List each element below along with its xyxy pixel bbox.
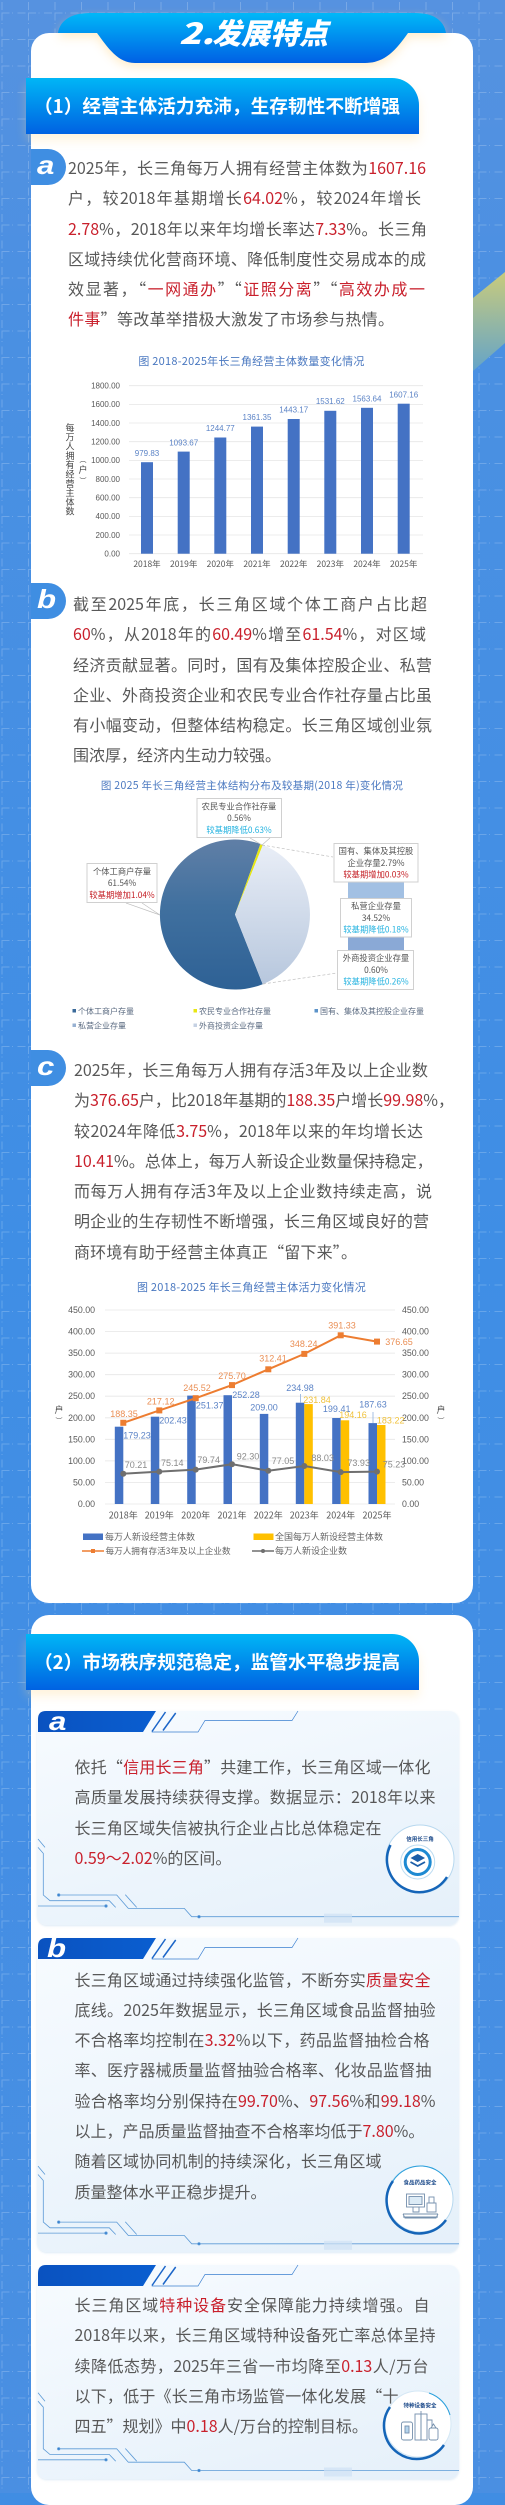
pie chart title: 图 2025 年长三角经营主体结构分布及较基期(2018 年)变化情况 — [101, 778, 403, 793]
y-axis title: ︵ — [80, 455, 86, 465]
combo chart: business vitality 2018-2025: 234.98 — [286, 1383, 314, 1393]
bar chart: number of business entities 2018-2025: 400.00 — [96, 512, 121, 521]
pie chart: business entity structure 2025 — [72, 778, 424, 1032]
text block c — [74, 1057, 454, 1263]
combo chart: business vitality 2018-2025: 209.00 — [250, 1402, 278, 1412]
sub-panel c: special equipment — [37, 2264, 459, 2479]
text block b: 60%，从2018年的60.49%增至61.54%，对区域 — [73, 621, 426, 645]
text block a: 2.78%，2018年以来年均增长率达7.33%。长三角 — [68, 216, 427, 240]
combo chart: business vitality 2018-2025: 2018年 — [109, 1508, 138, 1522]
text block b: 企业、外商投资企业和农民专业合作社存量占比虽 — [73, 682, 432, 706]
combo chart: business vitality 2018-2025: 194.16 — [339, 1410, 367, 1420]
y-axis title: 经 — [65, 468, 75, 480]
combo chart: business vitality 2018-2025: 73.93 — [347, 1458, 370, 1468]
y-axis title: 主 — [65, 486, 75, 499]
text block quality: 验合格率均分别保持在99.70%、97.56%和99.18% — [74, 2088, 435, 2112]
bar chart: number of business entities 2018-2025: 1443.17 — [279, 405, 309, 414]
bar chart: number of business entities 2018-2025: 800.00 — [96, 475, 121, 484]
text block c: 明企业的生存韧性不断增强，长三角区域良好的营 — [74, 1208, 429, 1232]
bar chart: number of business entities 2018-2025: 200.00 — [96, 531, 121, 540]
bar chart: number of business entities 2018-2025: 2020年 — [207, 558, 234, 570]
combo chart: business vitality 2018-2025: 2023年 — [290, 1508, 319, 1522]
bar chart: number of business entities 2018-2025: 2021年 — [243, 558, 271, 570]
callout: individual businesses: 个体工商户存量 — [93, 866, 151, 878]
bar chart: number of business entities 2018-2025: 1400.00 — [91, 419, 121, 428]
icon: special equipment safety: 特种设备安全 — [403, 2402, 437, 2410]
text block special equipment — [74, 2292, 436, 2437]
axis units: ︶ — [56, 1416, 62, 1426]
text block quality: 率、医疗器械质量监督抽验合格率、化妆品监督抽 — [74, 2057, 432, 2081]
sub-panel a: credit — [37, 1711, 459, 1925]
text block quality: 不合格率均控制在3.32%以下，药品监督抽检合格 — [74, 2027, 429, 2051]
pie legend: 外商投资企业存量 — [199, 1020, 263, 1032]
axis units: ︵ — [438, 1402, 444, 1412]
combo chart: business vitality 2018-2025: 50.00 — [73, 1477, 95, 1487]
combo chart: business vitality 2018-2025: 2020年 — [181, 1508, 210, 1522]
bar chart: number of business entities 2018-2025: 1531.62 — [316, 397, 345, 406]
bar chart: number of business entities 2018-2025: 1600.00 — [91, 400, 121, 409]
orange line — [120, 1332, 380, 1426]
text block special equipment: 2018年以来，长三角区域特种设备死亡率总体呈持 — [74, 2322, 436, 2346]
combo chart: business vitality 2018-2025: 217.12 — [147, 1396, 174, 1406]
combo chart: business vitality 2018-2025: 252.28 — [232, 1390, 260, 1400]
y-axis title: 户 — [78, 463, 88, 476]
text block a: 件事”等改革举措极大激发了市场参与热情。 — [68, 306, 394, 330]
bar chart: number of business entities 2018-2025: 2019年 — [170, 558, 198, 570]
y-axis title — [65, 421, 88, 518]
badge b — [31, 583, 66, 619]
banner and circuit decoration c — [38, 2264, 459, 2476]
combo chart: business vitality 2018-2025: 350.00 — [68, 1348, 95, 1358]
combo chart: business vitality 2018-2025: 179.23 — [123, 1430, 151, 1440]
text block quality: 底线。2025年数据显示，长三角区域食品监督抽验 — [74, 1997, 436, 2021]
combo chart: business vitality 2018-2025: 231.84 — [303, 1395, 331, 1405]
combo chart: business vitality 2018-2025: 75.14 — [161, 1458, 184, 1468]
text block a: 效显著，“一网通办”“证照分离”“高效办成一 — [68, 276, 425, 300]
pie legend: 农民专业合作社存量 — [199, 1006, 271, 1017]
combo chart: business vitality 2018-2025: 0.00 — [78, 1499, 95, 1509]
bar chart: number of business entities 2018-2025: 1800.00 — [91, 382, 121, 390]
icon: credit Yangtze delta: 信用长三角 — [406, 1835, 434, 1843]
callout: foreign investment: 0.60% — [364, 964, 388, 976]
combo chart: business vitality 2018-2025: 188.35 — [110, 1409, 138, 1419]
bar chart: number of business entities 2018-2025: 2018年 — [133, 558, 161, 570]
text block a: 区域持续优化营商环境、降低制度性交易成本的成 — [68, 246, 426, 270]
y-axis title: 每 — [65, 421, 75, 434]
combo chart: business vitality 2018-2025: 391.33 — [328, 1320, 356, 1330]
y-axis title: 营 — [65, 477, 75, 490]
combo chart: business vitality 2018-2025: 2025年 — [363, 1508, 391, 1522]
combo chart: business vitality 2018-2025: 100.00 — [402, 1456, 429, 1466]
combo chart: business vitality 2018-2025: 2021年 — [218, 1508, 246, 1522]
callout: private enterprises: 较基期降低0.18% — [343, 924, 409, 936]
text block special equipment: 续降低态势，2025年三省一市均降至0.13人/万台 — [74, 2353, 428, 2377]
text block c: 商环境有助于经营主体真正“留下来”。 — [74, 1239, 357, 1263]
bar chart: number of business entities 2018-2025: 2024年 — [353, 558, 381, 570]
gray line — [120, 1461, 380, 1477]
text block c: 2025年，长三角每万人拥有存活3年及以上企业数 — [74, 1057, 428, 1081]
combo chart: business vitality 2018-2025: 77.05 — [272, 1456, 294, 1466]
section heading 1 — [26, 78, 419, 134]
combo chart: business vitality 2018-2025: 250.00 — [402, 1391, 429, 1401]
text block b — [73, 591, 432, 766]
combo chart: business vitality 2018-2025: 183.22 — [377, 1416, 404, 1426]
combo chart: business vitality 2018-2025: 450.00 — [402, 1305, 429, 1315]
y-axis title: 拥 — [65, 449, 75, 462]
pie legend: 国有、集体及其控股企业存量 — [320, 1006, 424, 1017]
combo chart: business vitality 2018-2025: 300.00 — [402, 1370, 429, 1380]
sub-panel b: quality supervision — [37, 1938, 459, 2252]
combo chart: business vitality 2018-2025: 350.00 — [402, 1348, 429, 1358]
callout: individual businesses — [87, 864, 157, 902]
title tab — [56, 11, 450, 72]
text block a — [68, 155, 427, 330]
icon: credit Yangtze delta — [386, 1824, 454, 1894]
combo chart: business vitality 2018-2025: 400.00 — [402, 1327, 429, 1337]
axis units: ︵ — [56, 1402, 62, 1412]
combo chart: business vitality 2018-2025: 50.00 — [402, 1477, 424, 1487]
icon: food and drug safety: 食品药品安全 — [403, 2178, 437, 2186]
pie legend: 私营企业存量 — [78, 1020, 126, 1032]
combo chart: business vitality 2018-2025: 187.63 — [359, 1400, 387, 1410]
callout: farmer cooperatives: 农民专业合作社存量 — [202, 800, 276, 812]
text block special equipment: 长三角区域特种设备安全保障能力持续增强。自 — [74, 2292, 429, 2316]
badge c — [31, 1050, 66, 1086]
bar chart: number of business entities 2018-2025: 2022年 — [280, 558, 308, 570]
callout: private enterprises — [340, 898, 412, 937]
callout: individual businesses: 较基期增加1.04% — [89, 889, 155, 901]
y-axis title: 体 — [65, 495, 75, 508]
combo chart: business vitality 2018-2025: 250.00 — [68, 1391, 95, 1401]
bar chart: number of business entities 2018-2025: 1200.00 — [91, 438, 121, 446]
bar chart: number of business entities 2018-2025: 600.00 — [96, 494, 121, 502]
y-axis title: 数 — [65, 505, 75, 518]
combo chart: business vitality 2018-2025: 88.03 — [311, 1453, 334, 1463]
bar chart: number of business entities 2018-2025 — [65, 353, 423, 570]
text block credit: 依托“信用长三角”共建工作，长三角区域一体化 — [74, 1754, 430, 1778]
text block quality: 长三角区域通过持续强化监管，不断夯实质量安全 — [74, 1966, 430, 1990]
badge a: a — [37, 150, 54, 180]
text block b: 经济贡献显著。同时，国有及集体控股企业、私营 — [73, 652, 432, 676]
combo chart: business vitality 2018-2025: 2024年 — [326, 1508, 355, 1522]
banner and circuit decoration b — [38, 1938, 459, 2250]
bar chart: number of business entities 2018-2025: 1607.16 — [389, 390, 419, 399]
letter b: b — [47, 1932, 66, 1962]
yellow bars — [304, 1404, 386, 1504]
combo chart legend: 每万人新设企业数 — [275, 1544, 347, 1557]
callout: individual businesses: 61.54% — [108, 877, 137, 889]
bar chart: number of business entities 2018-2025: 0.00 — [104, 550, 121, 558]
combo chart title: 图 2018-2025 年长三角经营主体活力变化情况 — [137, 1279, 366, 1295]
section heading 2 — [26, 1634, 419, 1690]
badge c: c — [37, 1051, 54, 1081]
combo chart: business vitality 2018-2025: 245.52 — [183, 1383, 211, 1393]
y-axis title: 人 — [65, 440, 75, 453]
callout: farmer cooperatives — [197, 798, 282, 838]
text block quality — [74, 1966, 436, 2203]
combo chart: business vitality 2018-2025: 376.65 — [385, 1337, 413, 1347]
y-axis title: ︶ — [80, 476, 86, 486]
combo chart: business vitality 2018-2025: 202.43 — [159, 1416, 187, 1426]
bar chart: number of business entities 2018-2025: 2025年 — [390, 558, 418, 570]
combo chart: business vitality 2018-2025: 150.00 — [402, 1434, 429, 1444]
combo chart: business vitality 2018-2025: 100.00 — [68, 1456, 95, 1466]
pie legend: 个体工商户存量 — [78, 1006, 134, 1017]
combo chart: business vitality 2018-2025: 275.70 — [218, 1371, 246, 1381]
combo chart: business vitality 2018-2025: 200.00 — [68, 1413, 95, 1423]
bar chart: number of business entities 2018-2025: 1000.00 — [91, 456, 121, 465]
callout: farmer cooperatives: 0.56% — [227, 812, 251, 824]
axis units: 户 — [54, 1403, 64, 1416]
badge b: b — [37, 584, 56, 614]
y-axis title: 万 — [65, 430, 75, 443]
combo chart: business vitality 2018-2025: 450.00 — [68, 1305, 95, 1315]
banner and circuit decoration a — [38, 1710, 459, 1922]
bar chart: number of business entities 2018-2025: 979.83 — [135, 449, 160, 458]
callout: state-owned: 企业存量2.79% — [348, 857, 405, 869]
text block b: 有小幅变动，但整体结构稳定。长三角区域创业氛 — [73, 712, 432, 736]
text block a: 户，较2018年基期增长64.02%，较2024年增长 — [68, 185, 421, 209]
panel: development characteristics, section 1 — [31, 33, 473, 1603]
callout: state-owned: 国有、集体及其控股 — [339, 845, 413, 857]
combo chart: business vitality 2018-2025: 92.30 — [237, 1452, 259, 1462]
axis units — [54, 1402, 446, 1426]
axis units: 户 — [436, 1403, 446, 1416]
text block credit: 高质量发展持续获得支撑。数据显示：2018年以来 — [74, 1784, 436, 1808]
combo chart: business vitality 2018-2025: 70.21 — [125, 1460, 147, 1470]
title text: 2. — [179, 11, 214, 53]
combo chart legend: 每万人拥有存活3年及以上企业数 — [106, 1545, 231, 1557]
callout: state-owned — [334, 844, 418, 882]
combo chart: business vitality 2018-2025: 400.00 — [68, 1327, 95, 1337]
callout: foreign investment — [338, 950, 414, 990]
panel: section 2 market order — [31, 1615, 473, 2505]
callout: farmer cooperatives: 较基期降低0.63% — [206, 824, 272, 836]
callout: foreign investment: 较基期降低0.26% — [343, 976, 409, 988]
combo chart: business vitality 2018-2025: 251.37 — [196, 1400, 223, 1410]
bar chart: number of business entities 2018-2025: 1244.77 — [206, 424, 235, 433]
text block c: 而每万人拥有存活3年及以上企业数持续走高，说 — [74, 1178, 432, 1202]
pie slices — [160, 840, 310, 990]
bar chart: number of business entities 2018-2025: 1361.35 — [243, 413, 272, 422]
combo chart: business vitality 2018-2025: 312.41 — [259, 1353, 287, 1363]
icon: special equipment safety — [382, 2390, 452, 2460]
combo chart legend: 全国每万人新设经营主体数 — [275, 1530, 383, 1543]
bar chart: number of business entities 2018-2025: 1093.67 — [169, 438, 199, 447]
pie legend — [72, 1006, 424, 1032]
text block c: 为376.65户，比2018年基期的188.35户增长99.98%， — [74, 1087, 454, 1111]
combo chart: business vitality 2018-2025: 348.24 — [290, 1339, 317, 1349]
badge a — [31, 148, 66, 184]
text block a: 2025年，长三角每万人拥有经营主体数为1607.16 — [68, 155, 426, 179]
text block credit — [74, 1754, 436, 1869]
text block quality: 随着区域协同机制的持续深化，长三角区域 — [74, 2148, 382, 2172]
combo chart: business vitality 2018-2025: 199.41 — [323, 1404, 350, 1414]
section heading 2: （2）市场秩序规范稳定，监管水平稳步提高 — [34, 1648, 400, 1675]
y-axis title: 有 — [65, 458, 75, 471]
callout: private enterprises: 私营企业存量 — [351, 900, 401, 912]
combo chart: business vitality 2018-2025: 2019年 — [145, 1508, 174, 1522]
letter a: a — [49, 1706, 66, 1736]
bar chart: number of business entities 2018-2025: 1563.64 — [353, 394, 382, 403]
combo chart legend — [82, 1530, 383, 1557]
text block c: 10.41%。总体上，每万人新设企业数量保持稳定， — [74, 1148, 433, 1172]
text block quality: 质量整体水平正稳步提升。 — [74, 2179, 267, 2203]
combo chart: business vitality 2018-2025 — [54, 1279, 446, 1557]
text block quality: 以上，产品质量监督抽查不合格率均低于7.80%。 — [74, 2118, 424, 2142]
text block credit: 0.59～2.02%的区间。 — [74, 1845, 231, 1869]
section heading 1: （1）经营主体活力充沛，生存韧性不断增强 — [34, 92, 400, 119]
combo chart: business vitality 2018-2025: 2022年 — [254, 1508, 283, 1522]
combo chart: business vitality 2018-2025: 300.00 — [68, 1370, 95, 1380]
text block b: 围浓厚，经济内生动力较强。 — [73, 742, 281, 766]
band colours behind callouts — [348, 880, 404, 900]
axis units: ︶ — [438, 1416, 444, 1426]
combo chart: business vitality 2018-2025: 200.00 — [402, 1413, 429, 1423]
callout: state-owned: 较基期增加0.03% — [343, 868, 409, 880]
text block b: 截至2025年底，长三角区域个体工商户占比超 — [73, 591, 427, 615]
bar chart: number of business entities 2018-2025: 2023年 — [317, 558, 344, 570]
callout: private enterprises: 34.52% — [362, 912, 391, 924]
text block special equipment: 以下，低于《长三角市场监管一体化发展“十 — [74, 2383, 398, 2407]
title text: 发展特点 — [212, 11, 328, 53]
chart title: 图 2018-2025年长三角经营主体数量变化情况 — [138, 353, 365, 369]
combo chart: business vitality 2018-2025: 0.00 — [402, 1499, 419, 1509]
combo chart: business vitality 2018-2025: 150.00 — [68, 1434, 95, 1444]
blue bars — [115, 1395, 377, 1504]
text block credit: 长三角区域失信被执行企业占比总体稳定在 — [74, 1815, 382, 1839]
text block c: 较2024年降低3.75%，2018年以来的年均增长达 — [74, 1118, 423, 1142]
callout: foreign investment: 外商投资企业存量 — [343, 952, 409, 964]
text block special equipment: 四五”规划》中0.18人/万台的控制目标。 — [74, 2413, 368, 2437]
combo chart: business vitality 2018-2025: 75.23 — [383, 1460, 405, 1470]
combo chart: business vitality 2018-2025: 79.74 — [197, 1455, 220, 1465]
combo chart legend: 每万人新设经营主体数 — [105, 1530, 195, 1543]
icon: food and drug safety — [385, 2166, 454, 2235]
